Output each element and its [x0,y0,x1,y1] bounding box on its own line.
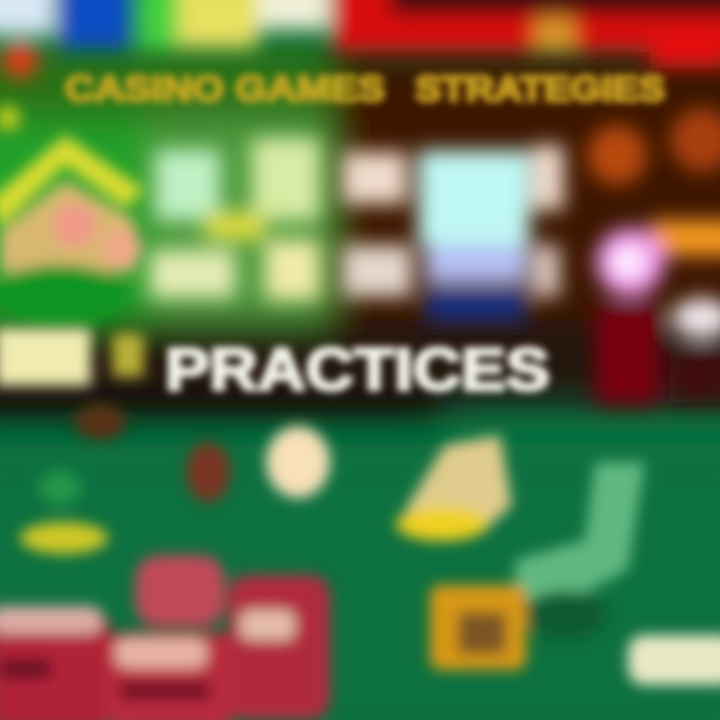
gold headline: STRATEGIES [415,68,665,109]
practices headline: PRACTICES [165,336,550,403]
top banner strip [0,0,720,78]
house illustration [0,105,145,325]
gold headline: CASINO GAMES [65,68,385,109]
right side lamps and figures [587,108,720,405]
green table items [20,404,720,685]
gold headline [65,68,665,109]
stack of red poker chips [0,555,330,720]
cream label and yellow ampersand [0,328,144,386]
large pale letter blocks [150,138,564,322]
